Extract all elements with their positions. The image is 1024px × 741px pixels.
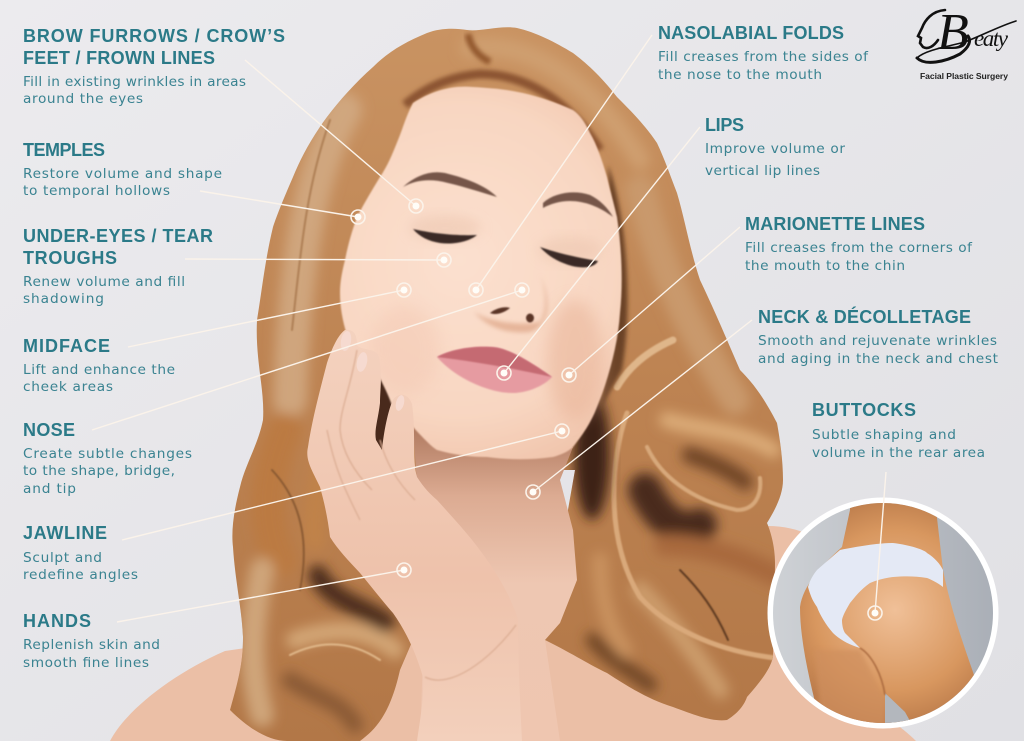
label: temples: TEMPLES: [23, 140, 105, 160]
eyebrow right: [543, 192, 613, 217]
label: temples: [23, 140, 222, 199]
label: brow furrows: [23, 26, 285, 107]
label: neck and decolletage: [758, 306, 999, 367]
inset leg crease: [860, 648, 885, 695]
callout lines and markers: [92, 35, 886, 622]
inset underwear: [808, 543, 943, 648]
label: jawline: Sculpt and: [23, 550, 102, 566]
label: hands: HANDS: [23, 611, 91, 631]
line: hands: [117, 563, 411, 622]
label: lips: LIPS: [705, 115, 744, 135]
label: hands: [23, 611, 160, 671]
label: under-eyes: shadowing: [23, 291, 104, 307]
line: marionette: [562, 227, 740, 382]
label: buttocks: volume in the rear area: [812, 445, 985, 461]
face cheek warmth: [370, 305, 440, 395]
hand: [307, 330, 522, 741]
label: jawline: redefine angles: [23, 567, 138, 583]
inset body: [800, 503, 974, 723]
dark hair strip beside face: [600, 165, 627, 410]
upper lip: [437, 347, 552, 377]
label: marionette lines: [745, 214, 973, 274]
label: brow furrows: BROW FURROWS / CROW’S: [23, 26, 285, 46]
inset ring: [768, 498, 998, 728]
label: jawline: JAWLINE: [23, 523, 107, 543]
logo: eaty: [974, 26, 1009, 51]
label: nose: to the shape, bridge,: [23, 463, 175, 479]
eyebrow left: [403, 172, 497, 197]
inset thigh shade: [820, 650, 884, 723]
label: under-eyes: Renew volume and fill: [23, 274, 185, 290]
label: under-eyes: [23, 226, 213, 307]
inset backdrop: [770, 500, 1000, 730]
logo swoosh: [917, 21, 1016, 58]
line: nose: [92, 283, 529, 430]
eye left: [413, 229, 477, 244]
logo tagline: Facial Plastic Surgery: [920, 71, 1008, 81]
photo: woman portrait: [110, 27, 916, 741]
eye right: [540, 247, 598, 267]
label: midface: MIDFACE: [23, 336, 110, 356]
finger creases: [327, 350, 516, 680]
crown shadow above hairline: [405, 74, 600, 150]
nose shadow: [474, 275, 547, 333]
label: buttocks: Subtle shaping and: [812, 427, 956, 443]
label: marionette lines: the mouth to the chin: [745, 258, 905, 274]
label: jawline: [23, 523, 138, 583]
panel: buttocks inset photo: [768, 495, 1000, 730]
label: brow furrows: FEET / FROWN LINES: [23, 48, 215, 68]
label: nasolabial folds: Fill creases from the sides of: [658, 49, 869, 65]
line: brow: [245, 60, 423, 213]
label: brow furrows: Fill in existing wrinkles in areas: [23, 74, 246, 90]
fingernails: [339, 330, 406, 412]
label: brow furrows: around the eyes: [23, 91, 143, 107]
hair part: [468, 34, 490, 62]
label: temples: to temporal hollows: [23, 183, 170, 199]
label: buttocks: BUTTOCKS: [812, 400, 916, 420]
line: lips: [497, 127, 700, 380]
label: nasolabial folds: the nose to the mouth: [658, 67, 822, 83]
inset gap between legs: [885, 693, 910, 723]
line: nasolabial: [469, 35, 652, 297]
line: temples: [200, 191, 365, 224]
label: nose: [23, 420, 192, 497]
label: under-eyes: UNDER-EYES / TEAR: [23, 226, 213, 246]
label: neck and decolletage: Smooth and rejuvenate wrinkles: [758, 333, 997, 349]
face: [340, 87, 622, 459]
logo script wordmark: B: [937, 4, 969, 61]
label: midface: Lift and enhance the: [23, 362, 175, 378]
label: hands: Replenish skin and: [23, 637, 160, 653]
hair colour masses: [253, 47, 775, 725]
line: midface: [128, 283, 411, 347]
label: nasolabial folds: NASOLABIAL FOLDS: [658, 23, 844, 43]
neck: [413, 427, 577, 741]
label: midface: [23, 336, 175, 395]
eye shadow right: [538, 237, 602, 263]
label: nose: NOSE: [23, 420, 75, 440]
label: marionette lines: Fill creases from the corners of: [745, 240, 973, 256]
label: lips: [705, 115, 845, 179]
dark hair under jaw: [574, 390, 610, 520]
logo underline stroke: [917, 36, 970, 62]
face right-side warmth: [547, 300, 603, 420]
lips: [437, 347, 552, 393]
label: neck and decolletage: NECK & DÉCOLLETAGE: [758, 306, 971, 327]
label: neck and decolletage: and aging in the neck and chest: [758, 351, 999, 367]
logo silhouette: [918, 10, 945, 48]
line: neck: [526, 320, 752, 499]
label: temples: Restore volume and shape: [23, 166, 222, 182]
label: marionette lines: MARIONETTE LINES: [745, 214, 925, 234]
label: nose: Create subtle changes: [23, 446, 192, 462]
label: lips: vertical lip lines: [705, 163, 820, 179]
label: buttocks: [812, 400, 985, 461]
label: hands: smooth fine lines: [23, 655, 149, 671]
hair mass: [230, 27, 783, 741]
label: nasolabial folds: [658, 23, 869, 83]
label: nose: and tip: [23, 481, 76, 497]
gap between hand and jaw: [372, 375, 398, 451]
label: lips: Improve volume or: [705, 141, 845, 157]
label: under-eyes: TROUGHS: [23, 248, 117, 268]
label: midface: cheek areas: [23, 379, 113, 395]
shoulders and chest: [110, 526, 916, 741]
line: buttocks: [868, 472, 886, 620]
nostrils: [490, 307, 534, 322]
line: under-eyes: [185, 253, 451, 267]
eye shadow left: [409, 215, 481, 241]
line: jawline: [122, 424, 569, 540]
logo: [917, 4, 1016, 81]
